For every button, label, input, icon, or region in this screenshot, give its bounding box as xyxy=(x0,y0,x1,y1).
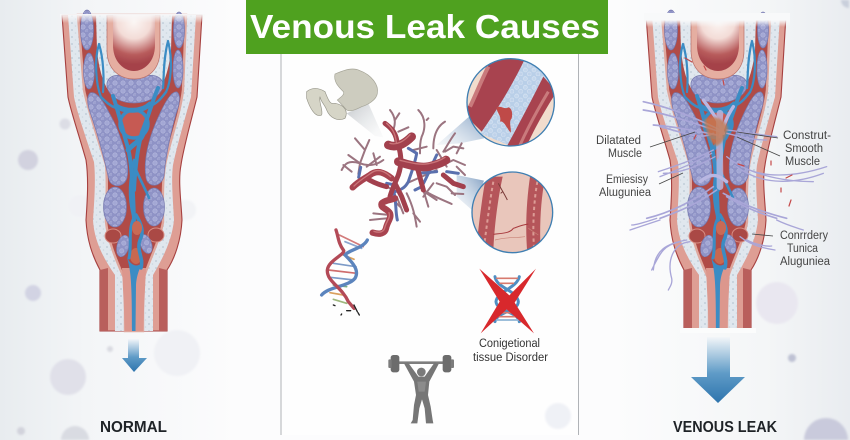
callout: constricted smooth muscle: Construt- xyxy=(783,130,831,142)
callout: constricted smooth muscle xyxy=(737,130,831,168)
callout: tunica albuginea: Tunica xyxy=(787,243,819,255)
callout: dilatated muscle: Dilatated xyxy=(596,135,641,147)
callout: tunica albuginea: Aluguniea xyxy=(780,256,831,268)
vessel network xyxy=(342,110,465,234)
callout: emiesisy albuginea: Emiesisy xyxy=(606,174,648,186)
callout: constricted smooth muscle: Smooth xyxy=(785,143,823,155)
magnifier cones xyxy=(437,109,484,211)
icon: pelvis bone xyxy=(307,69,383,137)
title banner: Venous Leak Causes xyxy=(250,8,600,45)
magnified view: damaged vessel xyxy=(463,57,557,150)
icon: weightlifter xyxy=(388,355,454,423)
label: normal: NORMAL xyxy=(100,419,167,436)
label: venous leak: VENOUS LEAK xyxy=(673,419,777,436)
magnified view: torn tunica xyxy=(472,172,553,253)
diagram: venous leak cross-section xyxy=(630,10,827,333)
icon: crossed-out DNA xyxy=(479,269,536,333)
icon: damaged DNA helix xyxy=(322,230,367,315)
label: congenital tissue disorder: Conigetional xyxy=(479,336,540,350)
callout: constricted smooth muscle: Muscle xyxy=(785,156,820,168)
callout: dilatated muscle: Muscle xyxy=(608,148,642,160)
arrow: venous leak flow xyxy=(691,337,745,403)
callout: tunica albuginea xyxy=(752,230,831,268)
label: congenital tissue disorder xyxy=(473,336,548,364)
callout: emiesisy albuginea: Alɯguniea xyxy=(599,187,652,199)
title banner xyxy=(246,0,608,54)
callout: emiesisy albuginea xyxy=(599,173,683,199)
arrow: normal flow xyxy=(122,339,147,372)
diagram: normal cross-section xyxy=(60,10,205,331)
callout: tunica albuginea: Conrrdery xyxy=(780,230,828,242)
callout: dilatated muscle xyxy=(596,132,695,160)
panel: centre causes xyxy=(281,50,579,435)
label: congenital tissue disorder: tissue Disorder xyxy=(473,350,548,364)
